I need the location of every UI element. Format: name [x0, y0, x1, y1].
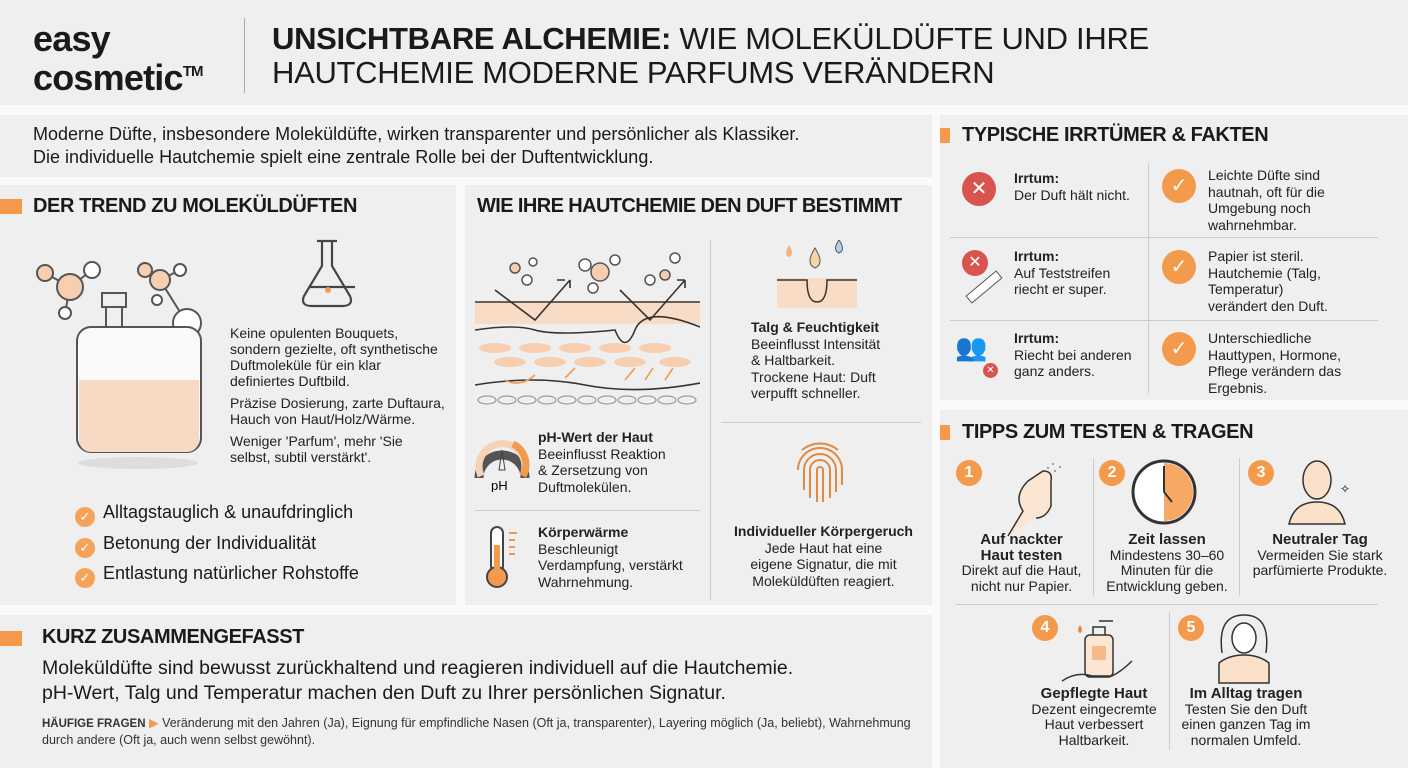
summary text — [42, 657, 793, 704]
text trend: selbst, subtil verstärkt'. — [230, 449, 371, 465]
logo: easy — [33, 18, 110, 59]
heading irrtümer: TYPISCHE IRRTÜMER & FAKTEN — [962, 124, 1268, 146]
tip 1: Haut testen — [981, 546, 1062, 564]
tip 1: 1 — [965, 464, 973, 481]
tip 1: Auf nackter — [980, 531, 1063, 548]
tip 4: 4 — [1041, 619, 1049, 636]
text pH: pH-Wert der Haut — [538, 429, 653, 445]
title: HAUTCHEMIE MODERNE PARFUMS VERÄNDERN — [272, 55, 994, 90]
skin diagram — [475, 252, 700, 404]
tip 3: Vermeiden Sie stark — [1257, 546, 1383, 562]
tip 4: Haut verbessert — [1045, 716, 1143, 732]
intro text: Die individuelle Hautchemie spielt eine zentrale Rolle bei der Duftentwicklung. — [33, 147, 653, 167]
fact 1: ✓ — [1171, 175, 1187, 197]
text talg: Trockene Haut: Duft — [751, 368, 876, 384]
text warmth — [538, 524, 683, 590]
text warmth: Körperwärme — [538, 524, 628, 540]
myth 2: Irrtum: — [1014, 248, 1059, 264]
fact 2: Temperatur) — [1208, 281, 1283, 297]
summary text: Moleküldüfte sind bewusst zurückhaltend und reagieren individuell auf die Hautchemie. — [42, 657, 793, 679]
text trend: Duftmoleküle für ein klar — [230, 357, 381, 373]
checklist: Betonung der Individualität — [103, 532, 316, 552]
myth 2: riecht er super. — [1014, 281, 1107, 297]
fact 2 — [1162, 248, 1328, 314]
fact 1: hautnah, oft für die — [1208, 184, 1325, 200]
fact 2: verändert den Duft. — [1208, 298, 1328, 314]
tip 3: ✧ — [1340, 482, 1350, 496]
fact 1 — [1162, 167, 1325, 232]
text body odor: Individueller Körpergeruch — [734, 523, 913, 539]
text pH: Beeinflusst Reaktion — [538, 446, 666, 462]
tip 3 — [1248, 460, 1387, 578]
tip 5 — [1178, 614, 1310, 748]
myth 1: Irrtum: — [1014, 170, 1059, 186]
myth 2: ✕ — [968, 254, 982, 271]
text pH — [538, 429, 666, 494]
fact 3: ✓ — [1171, 338, 1187, 360]
intro text: Moderne Düfte, insbesondere Moleküldüfte, wirken transparenter und persönlicher als Klassiker. — [33, 124, 799, 144]
text talg: Beeinflusst Intensität — [751, 336, 880, 352]
tip 2: Zeit lassen — [1128, 531, 1206, 548]
fact 2: ✓ — [1171, 256, 1187, 278]
icon: drops on skin — [777, 240, 857, 308]
checklist: Alltagstauglich & unaufdringlich — [103, 502, 353, 522]
fact 3: Pflege verändern das — [1208, 363, 1341, 379]
tip 4: Gepflegte Haut — [1041, 685, 1147, 702]
tip 2: Entwicklung geben. — [1106, 578, 1228, 594]
text talg: & Haltbarkeit. — [751, 352, 835, 368]
text body odor — [734, 523, 913, 589]
fact 3: Hauttypen, Hormone, — [1208, 346, 1341, 362]
myth 2: Auf Teststreifen — [1014, 264, 1110, 280]
text warmth: Verdampfung, verstärkt — [538, 557, 683, 573]
heading summary: KURZ ZUSAMMENGEFASST — [42, 626, 304, 648]
text body odor: Jede Haut hat eine — [765, 540, 882, 556]
checklist: Entlastung natürlicher Rohstoffe — [103, 563, 359, 583]
tip 4 — [1031, 615, 1157, 748]
checklist — [75, 502, 359, 588]
header panel — [0, 0, 1408, 105]
tip 4: Dezent eingecremte — [1031, 700, 1157, 716]
text body odor: Moleküldüften reagiert. — [752, 572, 895, 588]
tip 5: Im Alltag tragen — [1190, 685, 1302, 702]
panel: irrtümer — [940, 115, 1408, 400]
text warmth: Wahrnehmung. — [538, 574, 633, 590]
myth 1 — [962, 170, 1130, 206]
text pH: Duftmolekülen. — [538, 478, 631, 494]
panel: trend — [0, 185, 456, 605]
text warmth: Beschleunigt — [538, 540, 618, 556]
text body odor: eigene Signatur, die mit — [750, 556, 897, 572]
panel: tipps — [940, 410, 1408, 768]
tip 5: Testen Sie den Duft — [1185, 700, 1307, 716]
checklist: ✓ — [80, 509, 90, 524]
icon: fingerprint — [797, 442, 843, 502]
fact 2: Hautchemie (Talg, — [1208, 264, 1321, 280]
tip 3: 3 — [1257, 464, 1265, 481]
logo: cosmeticTM — [33, 57, 203, 98]
fact 2: Papier ist steril. — [1208, 248, 1304, 264]
intro text — [0, 115, 932, 177]
panel: hautchemie — [465, 185, 932, 605]
logo — [33, 18, 203, 98]
tip 1: Direkt auf die Haut, — [962, 562, 1081, 578]
fact 1: Umgebung noch — [1208, 200, 1311, 216]
text trend — [230, 325, 445, 465]
myth 3: Riecht bei anderen — [1014, 346, 1132, 362]
heading trend: DER TREND ZU MOLEKÜLDÜFTEN — [33, 195, 357, 217]
text trend: Keine opulenten Bouquets, — [230, 325, 398, 341]
icon: perfume bottle and molecules — [36, 240, 355, 469]
myth 1: Der Duft hält nicht. — [1014, 186, 1130, 202]
heading hautchemie: WIE IHRE HAUTCHEMIE DEN DUFT BESTIMMT — [477, 195, 901, 217]
faq: HÄUFIGE FRAGEN ▶ Veränderung mit den Jahren (Ja), Eignung für empfindliche Nasen (Oft ja, transparenter), Layering möglich (Ja, beliebt), Wahrnehmung durch andere (Oft ja, auch wenn selbst gewöhnt). — [42, 716, 911, 747]
text pH: & Zersetzung von — [538, 462, 648, 478]
tip 3: parfümierte Produkte. — [1253, 562, 1387, 578]
heading tipps: TIPPS ZUM TESTEN & TRAGEN — [962, 421, 1253, 443]
fact 3: Unterschiedliche — [1208, 330, 1312, 346]
tip 5: 5 — [1187, 619, 1195, 636]
fact 1: wahrnehmbar. — [1208, 216, 1297, 232]
fact 1: Leichte Düfte sind — [1208, 167, 1320, 183]
fact 3 — [1162, 330, 1341, 396]
text trend: Hauch von Haut/Holz/Wärme. Weniger 'Parfum', mehr 'Sie — [230, 411, 415, 449]
tip 2: Minuten für die — [1121, 562, 1213, 578]
checklist: ✓ — [80, 570, 90, 585]
icon: pH gauge — [474, 440, 530, 492]
tip 1 — [956, 460, 1081, 594]
icon: thermometer — [486, 526, 517, 588]
title: UNSICHTBARE ALCHEMIE: WIE MOLEKÜLDÜFTE UND IHRE — [272, 21, 1149, 56]
myth 3 — [955, 330, 1132, 379]
summary text: pH-Wert, Talg und Temperatur machen den Duft zu Ihrer persönlichen Signatur. — [42, 682, 726, 704]
myth 3: ganz anders. — [1014, 363, 1095, 379]
text talg: Talg & Feuchtigkeit — [751, 319, 879, 335]
checklist: ✓ — [80, 540, 90, 554]
myth 1: ✕ — [971, 178, 987, 200]
panel: summary — [0, 615, 932, 768]
text trend: definiertes Duftbild. Präzise Dosierung, zarte Duftaura, — [230, 373, 445, 411]
tip 3: Neutraler Tag — [1272, 531, 1368, 548]
text trend: sondern gezielte, oft synthetische — [230, 341, 438, 357]
fact 3: Ergebnis. — [1208, 380, 1267, 396]
myth 2 — [962, 248, 1110, 304]
tip 4: Haltbarkeit. — [1059, 732, 1129, 748]
myth 3: Irrtum: — [1014, 330, 1059, 346]
tip 5: einen ganzen Tag im — [1182, 716, 1310, 732]
text talg — [751, 319, 880, 401]
title — [272, 21, 1149, 90]
tip 5: normalen Umfeld. — [1191, 732, 1301, 748]
tip 1: nicht nur Papier. — [971, 578, 1072, 594]
myth 3: 👥 — [955, 332, 987, 362]
tip 2: Mindestens 30–60 — [1110, 546, 1224, 562]
myth 3: ✕ — [986, 365, 995, 376]
tip 2 — [1099, 460, 1228, 594]
text talg: verpufft schneller. — [751, 385, 860, 401]
tip 2: 2 — [1108, 464, 1116, 481]
